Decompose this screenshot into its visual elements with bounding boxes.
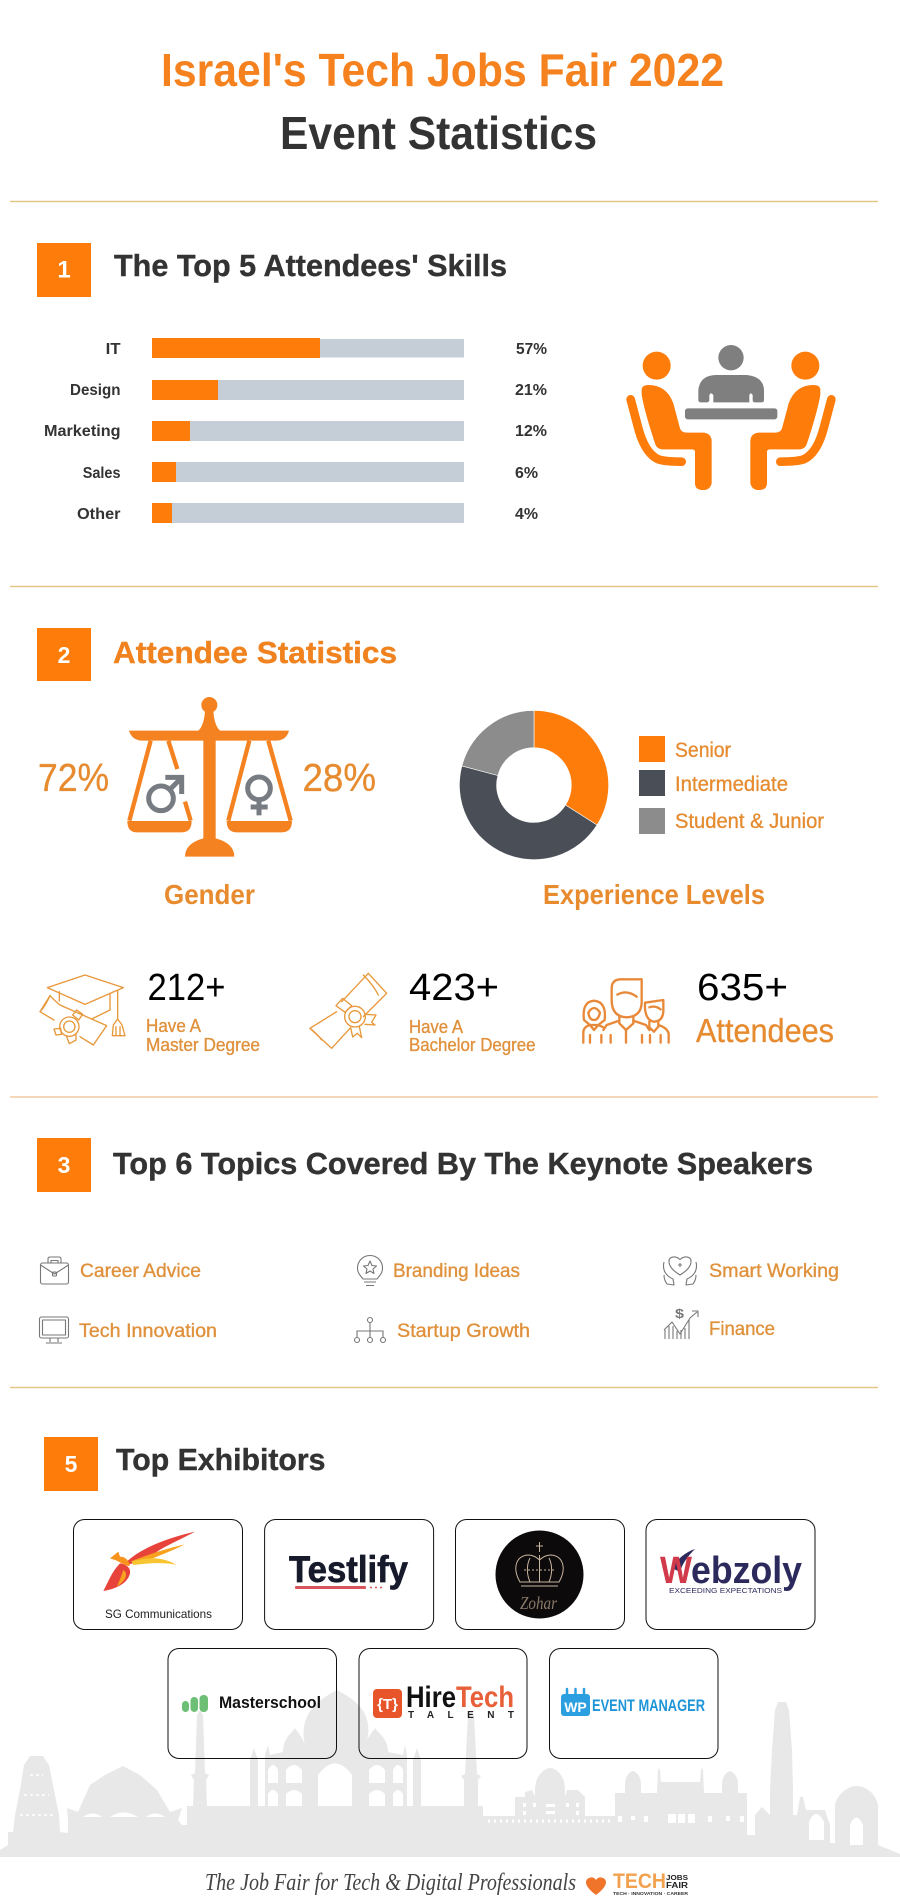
caption: Attendees bbox=[696, 1012, 834, 1049]
section 1 heading: 1 bbox=[57, 256, 71, 284]
exhibitor: WP Event Manager: WP bbox=[564, 1699, 587, 1715]
bar: Other 4%: 4% bbox=[515, 506, 538, 523]
topics list bbox=[40, 1256, 839, 1343]
footer logo: Tech Jobs Fair: JOBS bbox=[666, 1873, 688, 1882]
number: 635+: 635+ bbox=[697, 967, 788, 1009]
exhibitor: Masterschool bbox=[168, 1648, 336, 1758]
footer tagline: The Job Fair for Tech & Digital Professionals bbox=[205, 1870, 576, 1896]
legend bbox=[639, 736, 824, 834]
icon: balance scales bbox=[127, 697, 292, 857]
exhibitor: Zohar: Zohar bbox=[520, 1593, 558, 1613]
exhibitor: SG Communications: SG Communications bbox=[105, 1607, 212, 1621]
title: Israel's Tech Jobs Fair 2022 bbox=[161, 44, 724, 96]
bar: IT 57% bbox=[106, 338, 547, 358]
section 5 heading bbox=[44, 1437, 326, 1491]
title bbox=[161, 44, 724, 159]
footer logo: Tech Jobs Fair: TECH bbox=[613, 1870, 666, 1893]
topic: finance: Finance bbox=[709, 1319, 775, 1340]
exhibitor: HireTech Talent bbox=[359, 1648, 527, 1758]
stat: bachelor degree: Bachelor Degree bbox=[409, 1035, 536, 1055]
section 5 heading: Top Exhibitors bbox=[116, 1442, 326, 1477]
bar: Sales 6%: 6% bbox=[515, 465, 538, 482]
label: gender: Gender bbox=[164, 879, 255, 910]
bar: IT 57%: IT bbox=[106, 341, 121, 358]
legend: Senior bbox=[675, 739, 731, 762]
icon: three people at a table bbox=[631, 345, 831, 490]
icon: group of people bbox=[583, 979, 669, 1043]
topic: finance: $ bbox=[675, 1306, 685, 1321]
topic: finance bbox=[664, 1306, 775, 1340]
exhibitor: HireTech Talent: Hire bbox=[406, 1681, 456, 1714]
topic: branding ideas bbox=[358, 1256, 520, 1286]
footer logo: Tech Jobs Fair: FAIR bbox=[666, 1881, 688, 1890]
topic: career advice: Career Advice bbox=[80, 1261, 201, 1282]
topic: tech innovation bbox=[40, 1317, 217, 1343]
footer logo: Tech Jobs Fair bbox=[613, 1870, 689, 1896]
bar: Design 21%: 21% bbox=[515, 382, 547, 399]
icon: heart bbox=[586, 1877, 606, 1895]
number: 423+: 423+ bbox=[409, 967, 499, 1009]
footer logo: Tech Jobs Fair: TECH · INNOVATION · CAREER bbox=[613, 1891, 689, 1896]
exhibitor: WP Event Manager bbox=[550, 1648, 718, 1758]
title: Event Statistics bbox=[280, 107, 597, 159]
logo: crown bbox=[516, 1542, 563, 1586]
exhibitor: Testlify bbox=[265, 1520, 434, 1630]
donut chart bbox=[459, 710, 609, 860]
section 1 heading bbox=[37, 243, 507, 297]
exhibitor: Testlify: Testlify bbox=[289, 1549, 408, 1590]
bar: Marketing 12%: 12% bbox=[515, 423, 547, 440]
exhibitor: SG Communications bbox=[74, 1520, 242, 1630]
label: experience levels: Experience Levels bbox=[543, 879, 765, 910]
section 2 heading bbox=[37, 628, 397, 681]
logo: phoenix bbox=[103, 1532, 195, 1591]
exhibitor: Webzoly: ebzoly bbox=[691, 1550, 802, 1592]
bar: Sales 6%: Sales bbox=[83, 465, 121, 482]
topic: smart working: Smart Working bbox=[709, 1261, 839, 1282]
exhibitor: WP Event Manager: EVENT MANAGER bbox=[592, 1696, 705, 1715]
topic: startup growth: Startup Growth bbox=[397, 1321, 530, 1342]
topic: branding ideas: Branding Ideas bbox=[393, 1261, 520, 1282]
bar: Marketing 12% bbox=[44, 421, 547, 441]
legend: Intermediate bbox=[675, 773, 788, 796]
bar chart: skills bbox=[44, 338, 547, 523]
exhibitor: Webzoly: W bbox=[660, 1550, 692, 1592]
stat: 72% male: 72% bbox=[38, 757, 109, 800]
experience levels panel bbox=[459, 710, 824, 910]
stat: bachelor degree bbox=[310, 967, 536, 1055]
bar: Marketing 12%: Marketing bbox=[44, 423, 120, 440]
bar: Other 4%: Other bbox=[77, 506, 120, 523]
caption: Have A bbox=[146, 1016, 201, 1036]
section 5 heading: 5 bbox=[65, 1451, 78, 1477]
icon: graduation cap and diploma bbox=[40, 975, 125, 1045]
section 3 heading bbox=[37, 1138, 813, 1192]
topic: career advice bbox=[40, 1257, 201, 1284]
stat: 28% female: 28% bbox=[302, 757, 376, 800]
exhibitor: HireTech Talent: TALENT bbox=[408, 1710, 514, 1721]
topic: startup growth bbox=[354, 1318, 530, 1342]
exhibitor: Webzoly: EXCEEDING EXPECTATIONS bbox=[669, 1586, 782, 1595]
topic: tech innovation: Tech Innovation bbox=[79, 1321, 217, 1342]
exhibitor: HireTech Talent: Tech bbox=[456, 1681, 514, 1714]
section 2 heading: 2 bbox=[58, 642, 70, 668]
number: 212+: 212+ bbox=[148, 967, 226, 1009]
exhibitor: Zohar bbox=[456, 1520, 624, 1630]
bar: IT 57%: 57% bbox=[516, 341, 547, 358]
exhibitor: Masterschool: Masterschool bbox=[219, 1693, 321, 1712]
section 1 heading: The Top 5 Attendees' Skills bbox=[114, 248, 507, 283]
stat: master degree bbox=[40, 967, 260, 1055]
bar: Design 21%: Design bbox=[70, 382, 120, 399]
gender panel bbox=[38, 697, 376, 910]
section 2 heading: Attendee Statistics bbox=[113, 635, 397, 670]
exhibitor: Webzoly bbox=[646, 1520, 815, 1630]
legend: Student & Junior bbox=[675, 810, 824, 833]
section 3 heading: 3 bbox=[58, 1152, 70, 1178]
caption: Have A bbox=[409, 1017, 463, 1037]
icon: diploma scroll bbox=[310, 973, 387, 1048]
bar: Other 4% bbox=[77, 503, 538, 523]
bar: Sales 6% bbox=[83, 462, 538, 482]
bar: Design 21% bbox=[70, 380, 547, 400]
stat: master degree: Master Degree bbox=[146, 1035, 260, 1055]
stat: attendees bbox=[583, 967, 834, 1049]
background: city skyline bbox=[0, 1690, 900, 1857]
section 3 heading: Top 6 Topics Covered By The Keynote Speakers bbox=[113, 1146, 813, 1181]
topic: smart working bbox=[663, 1257, 839, 1285]
exhibitor: HireTech Talent: {T} bbox=[377, 1696, 398, 1713]
